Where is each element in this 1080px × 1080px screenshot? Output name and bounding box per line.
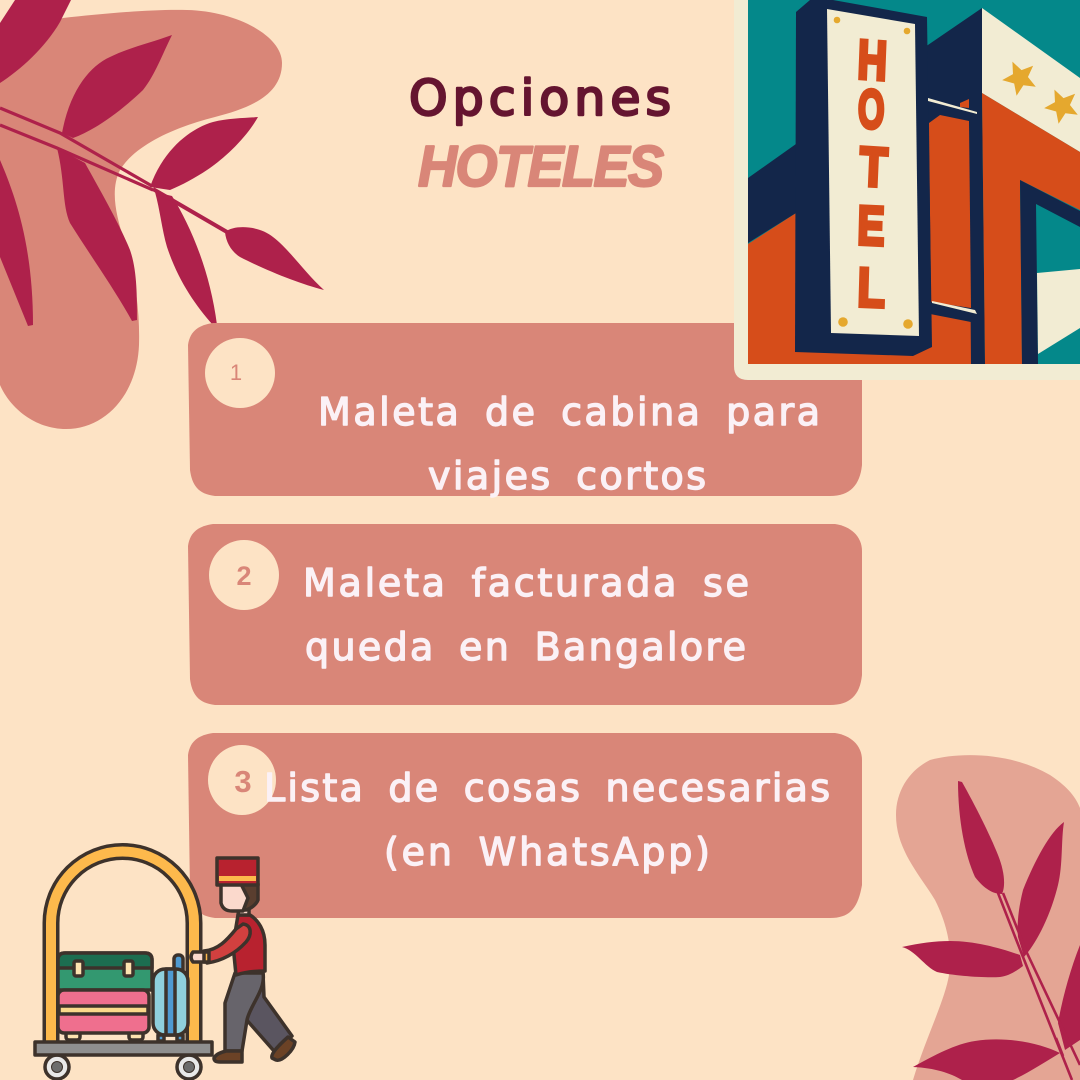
text: option 2: Maleta facturada se [303, 561, 749, 605]
text: option 2: queda en Bangalore [305, 625, 746, 669]
title: HOTELES [418, 133, 664, 198]
panel: option 2 [188, 524, 862, 705]
sign lettering: H [857, 29, 888, 93]
sign lettering: O [858, 79, 885, 140]
text: option 1: Maleta de cabina para [318, 390, 820, 434]
illustration: hotel [734, 0, 1080, 380]
badge: number 1 [205, 338, 275, 408]
panel: option 1 [188, 323, 862, 498]
sign lettering: T [858, 135, 889, 199]
cart arch [51, 852, 194, 1042]
badge: number 2 [209, 540, 279, 610]
decoration: bottom-right blob and leaves [896, 755, 1080, 1080]
badge: number 3 [208, 745, 276, 815]
text: option 1 [318, 390, 820, 498]
decoration: top-left blob and leaves [0, 0, 324, 429]
green suitcase [58, 953, 152, 990]
sign lettering: E [857, 195, 885, 258]
text: option 1: viajes cortos [428, 454, 706, 498]
sign lettering [857, 29, 889, 319]
pink suitcase [58, 990, 149, 1040]
icon: stars [997, 54, 1080, 126]
badge: number 1: 1 [230, 360, 242, 385]
title: Opciones [409, 70, 671, 127]
title [409, 70, 671, 198]
cart base and wheels [35, 1042, 212, 1079]
text: option 3: (en WhatsApp) [384, 830, 710, 874]
text: option 2 [303, 561, 749, 669]
badge: number 3: 3 [234, 764, 252, 799]
illustration: bellhop with luggage cart [35, 852, 295, 1079]
text: option 3 [264, 766, 830, 874]
blue suitcase [153, 955, 188, 1041]
text: option 3: Lista de cosas necesarias [264, 766, 830, 810]
sign lettering: L [857, 256, 886, 319]
badge: number 2: 2 [236, 561, 252, 591]
bellhop [191, 858, 295, 1062]
panel: option 3 [188, 733, 862, 918]
